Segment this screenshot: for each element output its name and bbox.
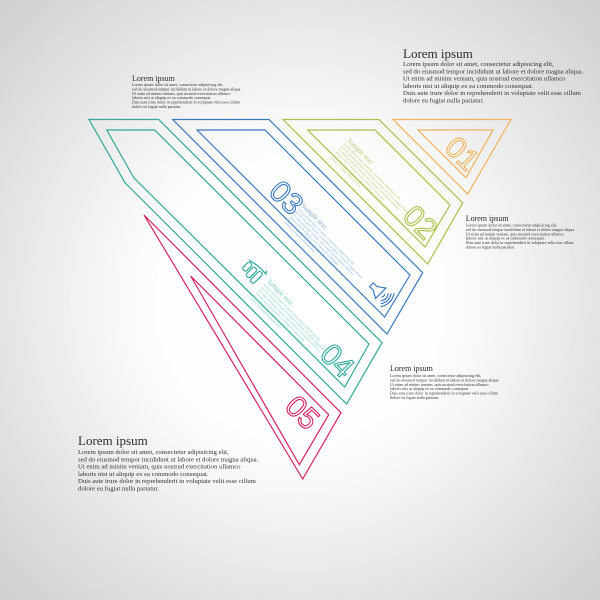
text block: lower middle: Ut enim ad minim veniam, quis nostrud exercitation ullamco [390,382,489,388]
text block: bottom left: Lorem ipsum dolor sit amet, consectetur adipisicing elit, [78,449,229,456]
text block: middle right: dolore eu fugiat nulla pariatur. [466,244,515,250]
text block: top right: Duis aute irure dolor in reprehenderit in voluptate velit esse cillum [403,90,582,97]
sample text 02: Duis aute irure dolor in reprehenderit in voluptate velit esse cillum [332,153,401,222]
sample text 04: Sample text [266,278,295,307]
sample text 03: sed do eiusmod tempor incididunt ut labore et dolore magna aliqua. [294,210,364,280]
sample text 02: laboris nisi ut aliquip ex ea commodo consequat. [335,150,386,202]
text block: top right: sed do eiusmod tempor incididunt ut labore et dolore magna aliqua. [403,68,584,75]
sample text 02: dolore eu fugiat nulla pariatur. [329,156,362,189]
sample text 03: dolore eu fugiat nulla pariatur. [283,221,316,254]
text block: bottom left: dolore eu fugiat nulla pariatur. [78,486,159,492]
text block: top right [403,46,584,104]
text block: bottom left [78,433,259,492]
text block: top left: Lorem ipsum dolor sit amet, consectetur adipisicing elit, [132,82,223,88]
sample text 04: dolore eu fugiat nulla pariatur. [249,297,282,330]
sample text 04: Ut enim ad minim veniam, quis nostrud exercitation ullamco [257,289,321,353]
sample text 03: Lorem ipsum dolor sit amet, consectetur adipisicing elit, [296,207,356,267]
segment 01: orange triangle [393,120,511,194]
number 01: 01 [438,131,485,178]
text block: middle right: Lorem ipsum [466,214,509,223]
text block: middle right [466,214,575,250]
sample text 03: Ut enim ad minim veniam, quis nostrud exercitation ullamco [291,213,355,277]
sample text 02: sed do eiusmod tempor incididunt ut labore et dolore magna aliqua. [340,145,410,215]
text block: lower middle: Lorem ipsum [390,364,434,373]
text block: top left: laboris nisi ut aliquip ex ea commodo consequat. [132,95,211,100]
text block: middle right: sed do eiusmod tempor incididunt ut labore et dolore magna aliqua. [466,227,575,232]
number 05: 05 [278,390,325,437]
text block: top left [132,74,241,109]
sample text 02: Sample text [346,137,375,166]
segment 03: blue band [173,120,423,334]
sample text 04: Lorem ipsum dolor sit amet, consectetur adipisicing elit, [262,283,322,343]
text block: lower middle: laboris nisi ut aliquip ex ea commodo consequat. [390,386,469,391]
sample text 04 [249,278,338,366]
text block: top left: Ut enim ad minim veniam, quis nostrud exercitation ullamco [132,91,231,97]
text block: lower middle: Lorem ipsum dolor sit amet, consectetur adipisicing elit, [390,373,481,379]
text block: middle right: Lorem ipsum dolor sit amet, consectetur adipisicing elit, [466,222,557,228]
sample text 03: Sample text [300,202,329,231]
text block: bottom left: Ut enim ad minim veniam, quis nostrud exercitation ullamco [78,464,241,471]
number 03: 03 [262,175,309,222]
sample text 02 [329,137,418,225]
text block: top right: laboris nisi ut aliquip ex ea commodo consequat. [403,83,534,90]
sample text 04: sed do eiusmod tempor incididunt ut labore et dolore magna aliqua. [260,286,330,356]
icon: speaker [365,278,396,309]
sample text 04: Duis aute irure dolor in reprehenderit in voluptate velit esse cillum [252,294,321,363]
text block: top left: Lorem ipsum [132,74,176,83]
text block: top right: Lorem ipsum [403,46,473,61]
text block: bottom left: Lorem ipsum [78,433,148,448]
segment 04: teal band [89,120,382,404]
text block: middle right: Ut enim ad minim veniam, quis nostrud exercitation ullamco [466,231,564,237]
text block: middle right: Duis aute irure dolor in reprehenderit in voluptate velit esse cillum [466,240,574,245]
segment 05: pink triangle [144,215,341,479]
text block: bottom left: laboris nisi ut aliquip ex ea commodo consequat. [78,471,209,478]
sample text 03: Duis aute irure dolor in reprehenderit in voluptate velit esse cillum [286,218,355,287]
number 04: 04 [313,338,360,385]
sample text 04: laboris nisi ut aliquip ex ea commodo consequat. [255,291,306,343]
text block: middle right: laboris nisi ut aliquip ex ea commodo consequat. [466,236,545,241]
text block: lower middle: sed do eiusmod tempor incididunt ut labore et dolore magna aliqua. [390,377,499,382]
text block: lower middle: Duis aute irure dolor in reprehenderit in voluptate velit esse cillum [390,391,499,396]
text block: bottom left: sed do eiusmod tempor incididunt ut labore et dolore magna aliqua. [78,456,259,463]
text block: top left: Duis aute irure dolor in reprehenderit in voluptate velit esse cillum [132,100,241,105]
text block: lower middle [390,364,499,400]
text block: top right: Ut enim ad minim veniam, quis nostrud exercitation ullamco [403,76,566,83]
number 02: 02 [396,199,443,246]
text block: bottom left: Duis aute irure dolor in reprehenderit in voluptate velit esse cillum [78,478,257,485]
text block: top left: sed do eiusmod tempor incididunt ut labore et dolore magna aliqua. [132,86,241,91]
icon: bar chart [239,256,268,285]
text block: top left: dolore eu fugiat nulla pariatur. [132,104,181,109]
segment 02: green band [283,120,463,264]
sample text 03: laboris nisi ut aliquip ex ea commodo consequat. [289,215,340,267]
sample text 03 [283,202,372,290]
text block: lower middle: dolore eu fugiat nulla pariatur. [390,395,439,400]
sample text 02: Ut enim ad minim veniam, quis nostrud exercitation ullamco [337,148,401,212]
sample text 02: Lorem ipsum dolor sit amet, consectetur adipisicing elit, [342,142,402,202]
text block: top right: dolore eu fugiat nulla pariatur. [403,98,484,104]
text block: top right: Lorem ipsum dolor sit amet, consectetur adipisicing elit, [403,61,554,68]
